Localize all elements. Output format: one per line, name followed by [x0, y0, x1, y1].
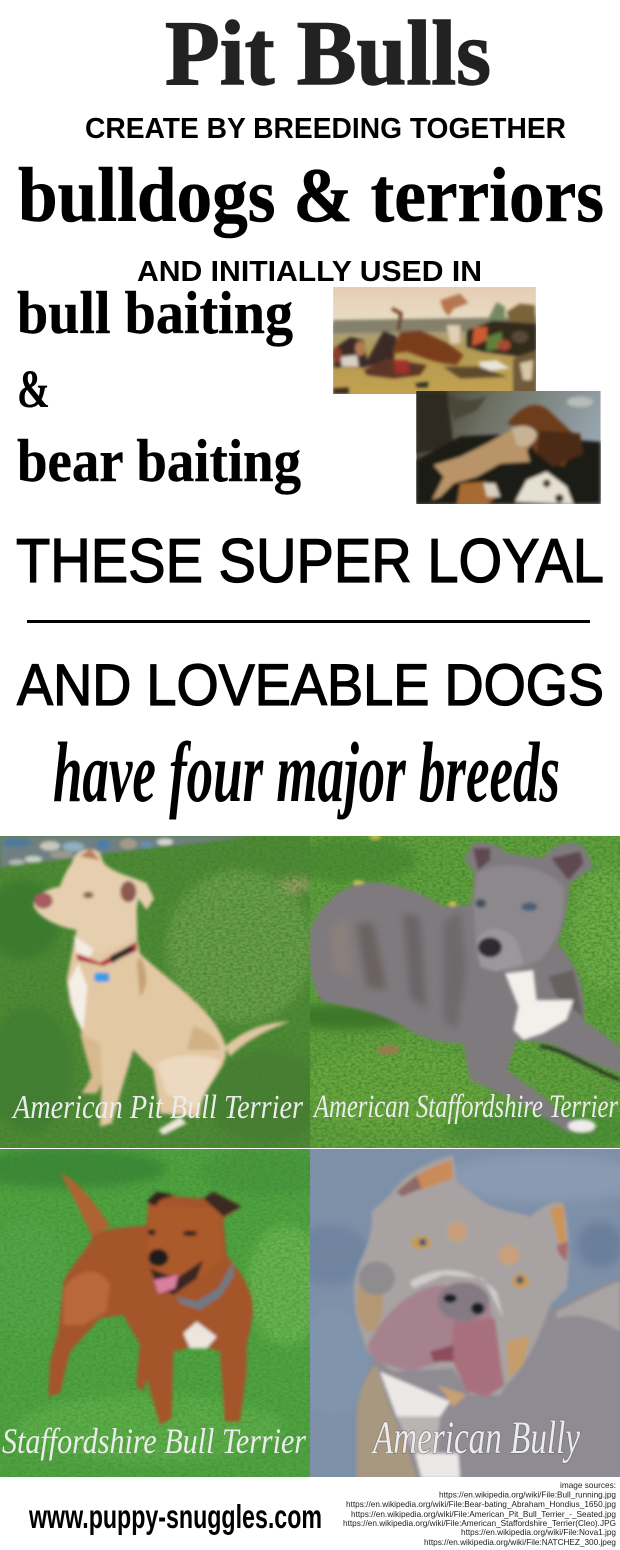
text: bear baiting: bear baiting	[17, 428, 301, 494]
photo: red-brown dog standing on grass	[0, 1149, 310, 1477]
painting: bull baiting	[333, 287, 536, 394]
painting: bear baiting	[416, 391, 601, 504]
subtitle: and initially used in: AND INITIALLY USED IN	[137, 256, 482, 288]
image sources: https://en.wikipedia.org/wiki/File:American_Pit_Bull_Terrier_-_Seated.jpg	[351, 1509, 616, 1519]
text: bull baiting: bull baiting	[17, 280, 293, 346]
image sources: https://en.wikipedia.org/wiki/File:Nova1.jpg	[461, 1527, 616, 1537]
image sources: https://en.wikipedia.org/wiki/File:Bear-bating_Abraham_Hondius_1650.jpg	[346, 1499, 616, 1509]
subtitle: create by breeding together: CREATE BY BREEDING TOGETHER	[85, 113, 566, 145]
image sources: https://en.wikipedia.org/wiki/File:NATCHEZ_300.jpeg	[424, 1537, 616, 1547]
image sources: image sources:	[560, 1480, 616, 1490]
image sources: https://en.wikipedia.org/wiki/File:Bull_running.jpg	[439, 1490, 616, 1500]
image sources	[343, 1480, 616, 1547]
title: Pit Bulls	[165, 2, 491, 104]
website url: www.puppy-snuggles.com	[28, 1498, 322, 1535]
photo panel: American Pit Bull Terrier	[0, 836, 327, 1148]
caption: Staffordshire Bull Terrier	[2, 1421, 307, 1461]
text: ampersand: &	[17, 359, 50, 419]
photo: grey-tan bully close-up	[310, 1149, 620, 1477]
caption: American Pit Bull Terrier	[11, 1089, 304, 1126]
photo: grey dog lying on grass	[310, 836, 620, 1148]
photo: cream dog on grass	[0, 836, 310, 1148]
photo panel: American Bully	[290, 1149, 620, 1478]
photo panel: American Staffordshire Terrier	[283, 835, 620, 1150]
image sources: https://en.wikipedia.org/wiki/File:American_Staffordshire_Terrier(Cleo).JPG	[343, 1518, 616, 1528]
photo panel: Staffordshire Bull Terrier	[0, 1148, 333, 1477]
